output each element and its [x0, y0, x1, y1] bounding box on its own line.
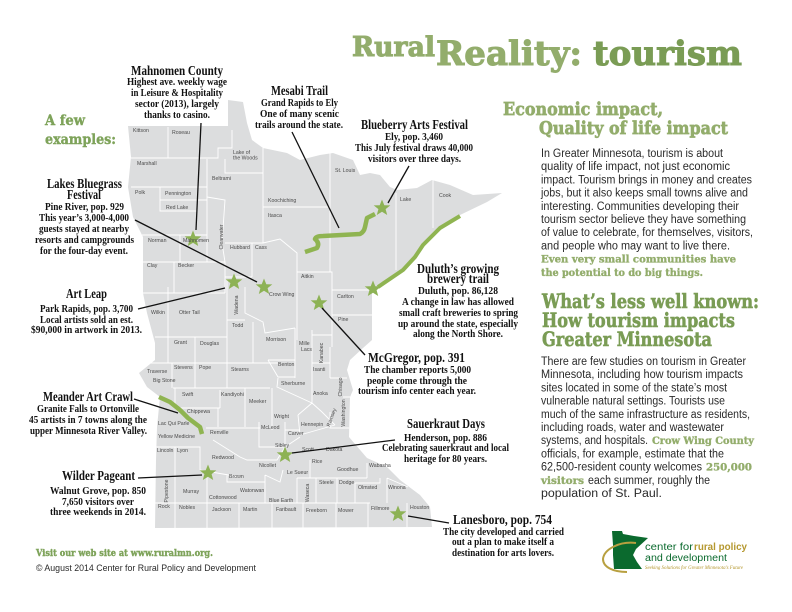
callout: Wilder Pageant: 7,650 visitors over: [62, 497, 134, 508]
county names: Swift: [182, 392, 194, 398]
callout: Lakes Bluegrass Festival: Festival: [67, 187, 101, 202]
callout: Duluth's growing brewery trail: A change in law has allowed: [402, 297, 514, 308]
trail: Meander Art Crawl: [159, 397, 202, 434]
county borders: [131, 127, 433, 528]
title: Reality:: [436, 34, 582, 74]
callout: Blueberry Arts Festival: This July festival draws 40,000: [355, 143, 473, 154]
callout: Art Leap: [31, 286, 142, 336]
callout: Lakes Bluegrass Festival: [35, 176, 134, 257]
heading: what's less well known: [541, 289, 759, 351]
county names: Lyon: [177, 448, 188, 454]
county names: Martin: [243, 507, 258, 513]
county names: Anoka: [313, 391, 328, 397]
callout: Art Leap: Park Rapids, pop. 3,700: [40, 304, 133, 315]
star: Mahnomen: [185, 230, 201, 246]
county names: Blue Earth: [269, 498, 293, 504]
callout: Mesabi Trail: Mesabi Trail: [271, 83, 328, 98]
callout: Lakes Bluegrass Festival: guests stayed at nearby: [39, 224, 130, 235]
county names: Chisago: [338, 377, 344, 397]
heading: a few examples: A few: [44, 113, 86, 129]
callout: Lakes Bluegrass Festival: for the four-day event.: [40, 246, 128, 257]
county names: Steele: [319, 480, 334, 486]
callout: Duluth's growing brewery trail: brewery trail: [427, 271, 489, 286]
county names: the Woods: [233, 156, 258, 162]
callout: McGregor: people come through the: [367, 376, 467, 387]
callout: Meander Art Crawl: [29, 389, 147, 437]
county names: Crow Wing: [269, 292, 294, 298]
text block: quality of life: jobs, but it also keeps small towns alive and: [540, 188, 748, 200]
callout: Wilder Pageant: Wilder Pageant: [62, 468, 135, 483]
text block: quality of life: In Greater Minnesota, tourism is about: [541, 148, 724, 160]
text block: tourism impacts: officials, for example, estimate that the: [541, 448, 724, 460]
county names: Houston: [410, 505, 429, 511]
county names: Faribault: [276, 507, 297, 513]
callout: Mahnomen County: [127, 63, 227, 121]
callout: Lanesboro: The city developed and carried: [443, 527, 564, 538]
logo icon: gold swoosh: [603, 543, 636, 572]
county names: Murray: [183, 489, 200, 495]
county names: Hennepin: [301, 422, 323, 428]
county names: Sibley: [275, 443, 290, 449]
callout: Sauerkraut Days: Sauerkraut Days: [407, 416, 485, 431]
callout: Lanesboro: [443, 512, 564, 559]
county names: Waseca: [305, 484, 311, 502]
county names: St. Louis: [335, 168, 356, 174]
callout: Lakes Bluegrass Festival: This year’s 3,000-4,000: [39, 213, 129, 224]
callout: Sauerkraut Days: [382, 416, 509, 465]
county names: Clay: [147, 263, 158, 269]
county names: Isanti: [313, 367, 325, 373]
callout: Duluth's growing brewery trail: up around the state, especially: [398, 319, 519, 330]
text block: quality of life: of value to celebrate, for themselves, visitors,: [541, 227, 753, 239]
county names: Morrison: [266, 337, 286, 343]
county names: Brown: [229, 474, 244, 480]
star: McGregor: [311, 294, 327, 310]
callout: Art Leap: $90,000 in artwork in 2013.: [31, 325, 142, 336]
star: Pine River: [256, 278, 272, 294]
county names: McLeod: [261, 425, 280, 431]
callout: Mesabi Trail: One of many scenic: [260, 109, 339, 120]
text block: quality of life: Even very small communities have: [541, 254, 736, 266]
county names: Winona: [388, 485, 406, 491]
star: Henderson: [277, 446, 293, 462]
text block: tourism impacts: each summer, roughly the: [588, 475, 710, 487]
county names: Stevens: [174, 365, 193, 371]
county names: Lacs: [301, 347, 312, 353]
trail: Duluth brewery: [378, 216, 460, 287]
county names: Lake of: [233, 150, 251, 156]
county names: [133, 128, 452, 514]
callout: Mahnomen County: sector (2013), largely: [135, 99, 220, 110]
county names: Todd: [232, 323, 243, 329]
text block: tourism impacts: There are few studies on tourism in Greater: [541, 356, 746, 368]
heading: economic impact: Quality of life impact: [539, 118, 729, 139]
county names: Polk: [135, 190, 145, 196]
text block: tourism impacts: including roads, water and wastewater: [541, 422, 724, 434]
logo wordmark: center for: [645, 542, 694, 553]
callout: Mahnomen County: Mahnomen County: [131, 63, 223, 78]
county names: Cottonwood: [209, 495, 237, 501]
text block: tourism impacts: systems, and hospitals.: [541, 435, 648, 447]
callout: Lakes Bluegrass Festival: resorts and campgrounds: [35, 235, 134, 246]
callout: Art Leap: Art Leap: [66, 286, 107, 301]
county names: Mower: [338, 508, 354, 514]
county names: Rice: [312, 459, 322, 465]
county names: Douglas: [200, 341, 219, 347]
callout: Mesabi Trail: Grand Rapids to Ely: [261, 98, 339, 109]
callout: Duluth's growing brewery trail: [398, 261, 519, 340]
footer: Visit our web site at www.ruralmn.org.: [35, 549, 213, 559]
callout: McGregor: tourism info center each year.: [358, 386, 476, 397]
county names: Pine: [338, 317, 348, 323]
callout: Art Leap: Local artists sold an est.: [40, 315, 133, 326]
text block: tourism impacts: visitors: [540, 476, 584, 487]
callout: Mahnomen County: in Leisure & Hospitality: [131, 88, 224, 99]
county names: Ramsey: [326, 407, 338, 428]
trail: Mesabi: [305, 214, 375, 252]
county names: Lake: [400, 197, 411, 203]
callout: Duluth's growing brewery trail: Duluth’s growing: [417, 261, 499, 276]
callout: Lanesboro: out a plan to make itself a: [452, 537, 555, 548]
label: Mahnomen in star: Mahnomen: [183, 238, 209, 244]
county names: Nobles: [179, 505, 196, 511]
county names: Lincoln: [157, 448, 174, 454]
callout: McGregor: McGregor, pop. 391: [368, 350, 465, 365]
heading: economic impact: [503, 99, 729, 139]
callout: Duluth's growing brewery trail: small craft breweries to spring: [399, 308, 519, 319]
county names: Redwood: [212, 455, 234, 461]
callout: Blueberry Arts Festival: Ely, pop. 3,460: [385, 132, 443, 143]
county names: Koochiching: [268, 198, 296, 204]
county names: Wilkin: [151, 310, 165, 316]
callout: Meander Art Crawl: Granite Falls to Ortonville: [37, 404, 139, 415]
title: tourism: [593, 34, 742, 74]
county names: Becker: [178, 263, 194, 269]
county names: Pennington: [165, 191, 191, 197]
callout: Lanesboro: Lanesboro, pop. 754: [453, 512, 552, 527]
county names: Marshall: [137, 161, 157, 167]
text block: tourism impacts: Minnesota, including how tourism impacts: [541, 369, 743, 381]
state outline: [128, 100, 502, 528]
logo wordmark: Seeking Solutions for Greater Minnesota’s Future: [645, 566, 744, 571]
text block: tourism impacts: [540, 356, 755, 500]
county names: Nicollet: [259, 463, 277, 469]
county names: Washington: [341, 399, 347, 427]
county names: Traverse: [147, 369, 167, 375]
callout: Sauerkraut Days: Henderson, pop. 886: [404, 433, 487, 444]
county names: Chippewa: [187, 409, 210, 415]
heading: a few examples: examples:: [45, 132, 116, 148]
county names: Otter Tail: [179, 310, 200, 316]
callout: Wilder Pageant: three weekends in 2014.: [50, 507, 146, 518]
county names: Kittson: [133, 128, 149, 134]
callout: Lakes Bluegrass Festival: Lakes Bluegrass: [47, 176, 122, 191]
county names: Watonwan: [240, 488, 264, 494]
county names: Hubbard: [230, 245, 250, 251]
heading: what's less well known: Greater Minnesota: [542, 327, 712, 351]
star: Ely: [374, 200, 390, 215]
leader lines: [134, 123, 449, 523]
title: Rural: [352, 32, 435, 63]
callout: Sauerkraut Days: Celebrating sauerkraut and local: [382, 443, 509, 454]
county names: Benton: [278, 362, 295, 368]
callout: Mahnomen County: thanks to casino.: [144, 110, 210, 121]
star: Lanesboro: [390, 506, 406, 521]
county names: Kanabec: [319, 342, 325, 363]
logo wordmark: and development: [645, 553, 727, 564]
county names: Lac Qui Parle: [158, 421, 190, 427]
county names: Big Stone: [153, 378, 176, 384]
county names: Cass: [255, 245, 267, 251]
county names: Renville: [210, 430, 229, 436]
star: Walnut Grove: [200, 464, 216, 480]
callout: McGregor: [358, 350, 476, 397]
logo icon: Minnesota shape: [612, 531, 648, 569]
callout: Mesabi Trail: trails around the state.: [255, 120, 343, 131]
county names: Sherburne: [281, 381, 305, 387]
county names: Aitkin: [301, 274, 314, 280]
map of Minnesota: [128, 100, 502, 528]
text block: quality of life: quality of life impact, not just economic: [541, 161, 730, 173]
county names: Olmsted: [358, 485, 377, 491]
text block: tourism impacts: vulnerable natural settings. Tourists use: [541, 396, 725, 408]
county names: Jackson: [212, 507, 231, 513]
county names: Dodge: [339, 480, 354, 486]
text block: tourism impacts: population of St. Paul.: [541, 488, 662, 500]
text block: quality of life: tourism sector believe they have something: [541, 214, 746, 226]
county names: Dakota: [326, 447, 343, 453]
callout: Meander Art Crawl: Meander Art Crawl: [43, 389, 133, 404]
county names: Rock: [158, 504, 170, 510]
text block: quality of life: the potential to do big things.: [541, 268, 703, 279]
county names: Clearwater: [219, 224, 225, 250]
county names: Yellow Medicine: [158, 434, 195, 440]
callout: Sauerkraut Days: heritage for 80 years.: [404, 454, 487, 465]
callout: Duluth's growing brewery trail: along the North Shore.: [413, 329, 503, 340]
heading: what's less well known: How tourism impacts: [542, 308, 735, 332]
callout: Wilder Pageant: [50, 468, 146, 518]
text block: tourism impacts: 250,000: [706, 462, 752, 474]
county names: Norman: [148, 238, 167, 244]
county names: Red Lake: [166, 205, 188, 211]
county names: Mille: [299, 341, 310, 347]
callout: McGregor: The chamber reports 5,000: [364, 365, 471, 376]
text block: tourism impacts: Crow Wing County: [652, 436, 755, 447]
callout: Blueberry Arts Festival: [355, 117, 473, 165]
county names: Itasca: [268, 213, 282, 219]
county names: Kandiyohi: [221, 392, 244, 398]
county names: Le Sueur: [287, 470, 308, 476]
text block: tourism impacts: sites located in some of the state’s most: [541, 382, 728, 394]
callout: Mesabi Trail: [255, 83, 343, 131]
county names: Stearns: [231, 367, 249, 373]
county names: Carlton: [337, 294, 354, 300]
text block: quality of life: interesting. Communities developing their: [541, 201, 739, 213]
text block: quality of life: [540, 148, 753, 279]
county names: Wright: [274, 414, 289, 420]
county names: Goodhue: [337, 467, 358, 473]
logo wordmark: rural policy: [694, 542, 747, 553]
county names: Wabasha: [369, 463, 391, 469]
county names: Scott: [302, 447, 314, 453]
callout: Lakes Bluegrass Festival: Pine River, pop. 929: [45, 202, 124, 213]
county names: Roseau: [172, 130, 190, 136]
heading: a few examples: [44, 113, 116, 148]
callout: Blueberry Arts Festival: visitors over three days.: [368, 154, 461, 165]
text block: quality of life: impact. Tourism brings in money and creates: [541, 174, 752, 186]
county names: Pipestone: [164, 479, 170, 503]
title: [352, 32, 742, 74]
text block: tourism impacts: much of the same infrastructure as residents,: [541, 409, 750, 421]
county names: Carver: [288, 431, 304, 437]
text block: tourism impacts: 62,500-resident county welcomes: [541, 462, 702, 474]
callout: Wilder Pageant: Walnut Grove, pop. 850: [50, 486, 146, 497]
county names: Freeborn: [306, 508, 327, 514]
callout: Blueberry Arts Festival: Blueberry Arts Festival: [361, 117, 468, 132]
callout: Duluth's growing brewery trail: Duluth, pop. 86,128: [418, 286, 498, 297]
county names: Wadena: [234, 295, 240, 315]
callout: Meander Art Crawl: upper Minnesota River Valley.: [30, 426, 147, 437]
callout: Meander Art Crawl: 45 artists in 7 towns along the: [29, 415, 147, 426]
callout: Lanesboro: destination for arts lovers.: [452, 548, 554, 559]
county names: Pope: [199, 365, 211, 371]
footer: © August 2014 Center for Rural Policy and Development: [36, 563, 256, 574]
footer: [35, 549, 256, 574]
text block: quality of life: and people who may want to live there.: [541, 240, 730, 252]
logo: Center for Rural Policy and Development: [603, 531, 747, 572]
county names: Meeker: [249, 399, 267, 405]
callout: Mahnomen County: Highest ave. weekly wage: [127, 77, 227, 88]
heading: economic impact: Economic impact,: [503, 99, 663, 120]
county names: Beltrami: [212, 176, 231, 182]
star: Duluth: [365, 280, 381, 296]
star: Park Rapids: [226, 274, 242, 289]
county names: Grant: [174, 340, 188, 346]
county names: Fillmore: [371, 506, 390, 512]
county names: Cook: [439, 193, 452, 199]
logo wordmark: [645, 542, 747, 571]
